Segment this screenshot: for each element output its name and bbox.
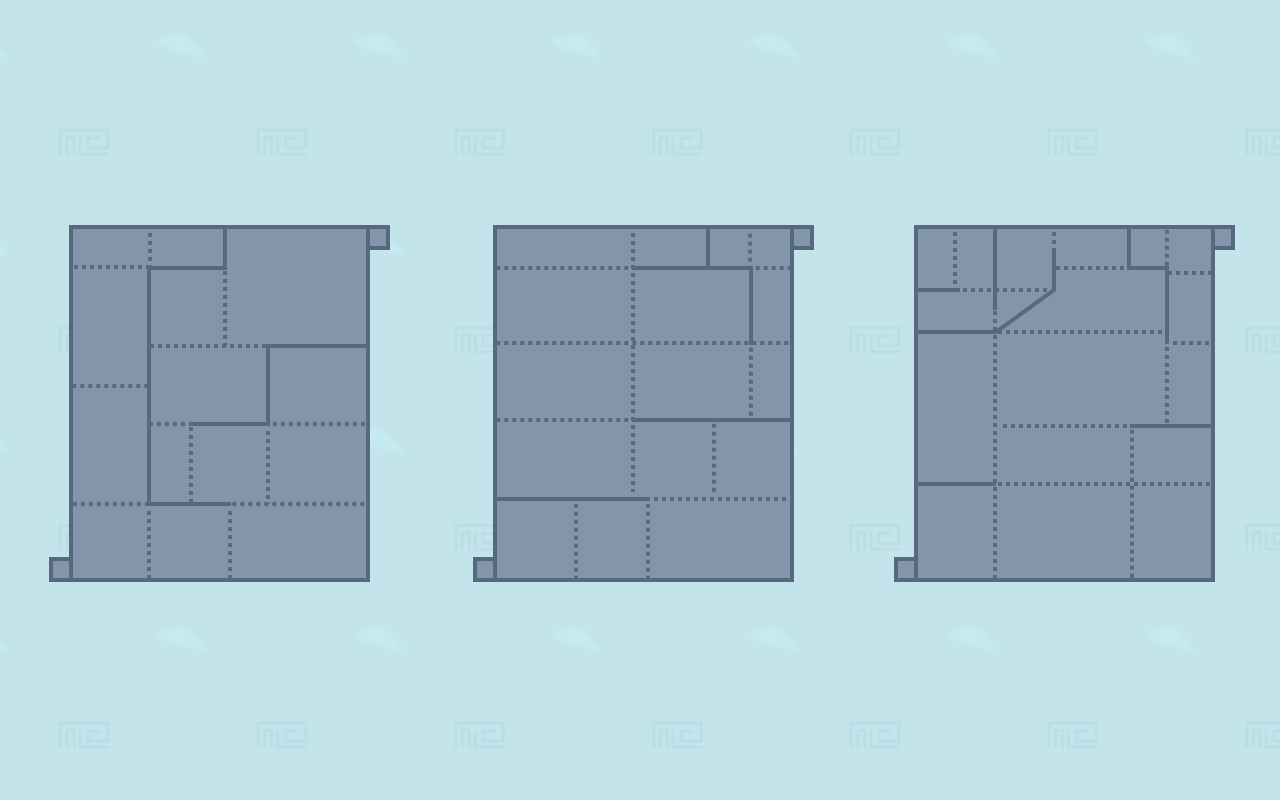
tab: top right corner 2 <box>792 227 812 248</box>
tab: bottom left corner 1 <box>51 559 71 580</box>
solid walls 3 <box>918 229 1211 484</box>
solid walls 1 <box>147 229 366 506</box>
panel: floor plan 1 <box>51 227 388 580</box>
panel: floor plan 2 <box>475 227 812 580</box>
tab: bottom left corner 3 <box>896 559 916 580</box>
dotted partitions 1 <box>72 233 366 580</box>
tab: bottom left corner 2 <box>475 559 495 580</box>
plan outline 3 <box>916 227 1213 580</box>
plan outline 1 <box>71 227 368 580</box>
panel: floor plan 3 <box>896 227 1233 580</box>
tab: top right corner 3 <box>1213 227 1233 248</box>
dotted partitions 3 <box>955 230 1211 580</box>
solid walls 2 <box>497 229 790 499</box>
dotted partitions 2 <box>496 233 790 580</box>
tab: top right corner 1 <box>368 227 388 248</box>
plan outline 2 <box>495 227 792 580</box>
